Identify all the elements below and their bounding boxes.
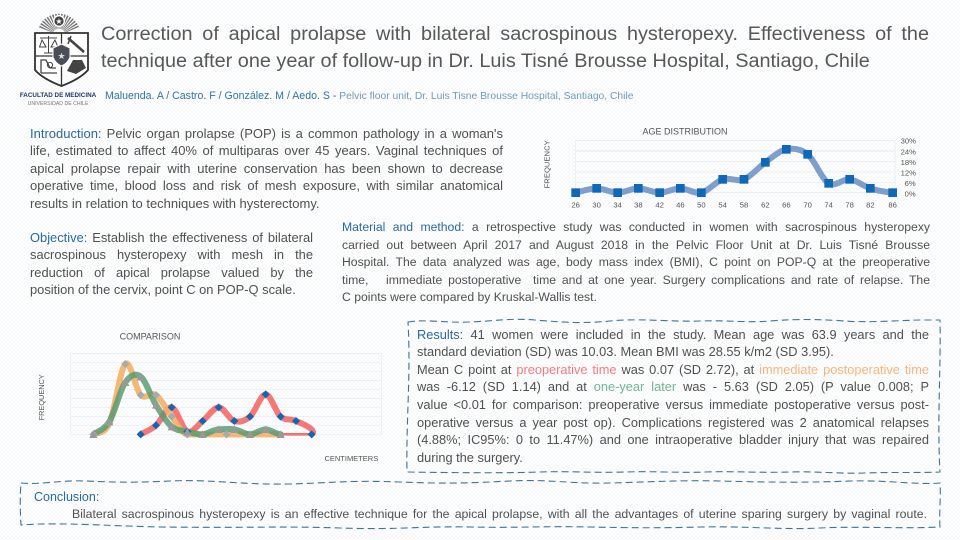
x axis labels: 78 xyxy=(845,200,854,209)
conclusion heading: Conclusion: xyxy=(34,490,99,504)
y axis labels: 12% xyxy=(901,169,916,178)
line series xyxy=(576,149,893,193)
gridlines and plot frame xyxy=(71,353,382,434)
markers: grey triangles xyxy=(89,373,285,438)
text block: introduction xyxy=(30,126,503,210)
chart title: AGE DISTRIBUTION xyxy=(642,126,728,136)
x axis labels xyxy=(571,200,897,209)
text block: results xyxy=(417,326,929,465)
text block: results: Mean C point at preoperative time was 0.07 (SD 2.72), at immediate postoperative time xyxy=(417,362,929,377)
text block: objective: reduction of apical prolapse valued by the xyxy=(30,264,313,280)
conclusion border xyxy=(20,480,941,530)
text block: material and method: Material and method: a retrospective study was conducted in women with sacrospinous hysteropexy xyxy=(342,220,930,234)
markers: grey diamonds xyxy=(89,360,231,438)
y axis labels xyxy=(901,137,916,199)
chart title: COMPARISON xyxy=(120,332,180,342)
logo: Facultad de Medicina crest xyxy=(20,14,97,107)
text block: introduction: Introduction: Pelvic organ prolapse (POP) is a common pathology in a woman's xyxy=(30,126,503,140)
conclusion text: Bilateral sacrospinous hysteropexy is an effective technique for the apical prolapse, with all the advantages of uterine sparing surgery by vaginal route. xyxy=(72,507,927,521)
x axis labels: 82 xyxy=(866,200,875,209)
markers: preoperative diamonds xyxy=(137,390,316,438)
text block: introduction: apical prolapse repair with uterine conservation has been shown to decrease xyxy=(30,160,503,176)
y axis labels: 0% xyxy=(905,190,916,199)
text block: results: Results: 41 women were included in the study. Mean age was 63.9 years and the xyxy=(417,326,929,342)
logo text: FACULTAD DE MEDICINA xyxy=(20,92,97,99)
x axis labels: 54 xyxy=(718,200,728,209)
authors and affiliation: Maluenda. A / Castro. F / González. M / Aedo. S - Pelvic floor unit, Dr. Luis Tisne Brousse Hospital, Santiago, Chile xyxy=(105,90,633,102)
text block: results: standard deviation (SD) was 10.03. Mean BMI was 28.55 k/m2 (SD 3.95). xyxy=(417,344,834,359)
text block: introduction: operative time, blood loss and risk of mesh exposure, with similar anatomical xyxy=(30,178,503,193)
axis label: frequency: FREQUENCY xyxy=(542,140,551,188)
x axis labels: 38 xyxy=(634,200,643,209)
icon: shield: ★ xyxy=(57,51,66,61)
title: technique after one year of follow-up in Dr. Luis Tisné Brousse Hospital, Santiago, Chile xyxy=(101,50,870,72)
y axis labels: 30% xyxy=(901,137,916,146)
x axis labels: 42 xyxy=(655,200,664,209)
text block: objective: position of the cervix, point C on POP-Q scale. xyxy=(30,282,296,297)
series: one year later xyxy=(93,375,281,434)
text block: results: operative versus a year post op). Complications registered was 2 anatomical relapses xyxy=(417,415,929,430)
axis label: centimeters: CENTIMETERS xyxy=(324,454,378,463)
x axis labels: 30 xyxy=(592,200,601,209)
text block: introduction: results in relation to techniques with hysterectomy. xyxy=(30,196,320,210)
text block: material and method xyxy=(342,220,930,304)
x axis labels: 66 xyxy=(782,200,791,209)
text block: results: was -6.12 (SD 1.14) and at one-year later was - 5.63 (SD 2.05) (P value 0.008; P xyxy=(417,379,929,394)
text block: introduction: life, estimated to affect 40% of multiparas over 45 years. Vaginal techniques of xyxy=(30,143,503,158)
text block: objective: sacrospinous hysteropexy with mesh in the xyxy=(30,247,313,262)
logo text: UNIVERSIDAD DE CHILE xyxy=(28,101,89,107)
x axis labels: 26 xyxy=(571,200,580,209)
panel: conclusion xyxy=(20,480,941,530)
series: preoperative xyxy=(141,394,313,434)
x axis labels: 86 xyxy=(888,200,897,209)
series: immediate postoperative xyxy=(93,364,281,434)
chart: age distribution xyxy=(542,126,916,209)
text block: objective: Objective: Establish the effectiveness of bilateral xyxy=(30,230,313,244)
chart: comparison xyxy=(37,332,382,463)
data markers xyxy=(571,145,897,197)
text block: results: (4.88%; IC95%: 0 to 11.47%) and one intraoperative bladder injury that was repaired xyxy=(417,432,929,447)
x axis labels: 58 xyxy=(740,200,748,209)
baseline tail of preoperative series xyxy=(277,430,312,438)
title xyxy=(101,23,929,72)
x axis labels: 34 xyxy=(613,200,623,209)
axis label: frequency: FREQUENCY xyxy=(37,374,46,420)
x axis labels: 46 xyxy=(676,200,685,209)
text block: material and method: C points were compared by Kruskal-Wallis test. xyxy=(342,290,597,304)
title: Correction of apical prolapse with bilateral sacrospinous hysteropexy. Effectiveness of the xyxy=(101,23,929,45)
text block: material and method: Hospital. The data analyzed was age, body mass index (BMI), C point on POP-Q at the preoperative xyxy=(342,255,930,269)
logo text xyxy=(20,92,97,107)
x axis labels: 70 xyxy=(803,200,812,209)
text block: results: value <0.01 for comparison: preoperative versus immediate postoperative versus post- xyxy=(417,397,929,412)
y axis labels: 24% xyxy=(901,148,916,157)
gridlines and plot frame xyxy=(576,141,895,193)
y axis labels: 6% xyxy=(905,179,916,188)
text block: material and method: carried out between April 2017 and August 2018 in the Pelvic Floor Unit at Dr. Luis Tisné Brousse xyxy=(342,238,930,252)
x axis labels: 50 xyxy=(697,200,706,209)
x axis labels: 74 xyxy=(824,200,834,209)
icon: sunburst with star: ★ xyxy=(55,17,63,26)
text block: objective xyxy=(30,230,313,297)
y axis labels: 18% xyxy=(901,158,916,167)
x axis labels: 62 xyxy=(761,200,770,209)
text block: results: during the surgery. xyxy=(417,450,523,465)
text block: material and method: time, immediate postoperative time and at one year. Surgery complications and rate of relapse. The xyxy=(342,273,930,287)
